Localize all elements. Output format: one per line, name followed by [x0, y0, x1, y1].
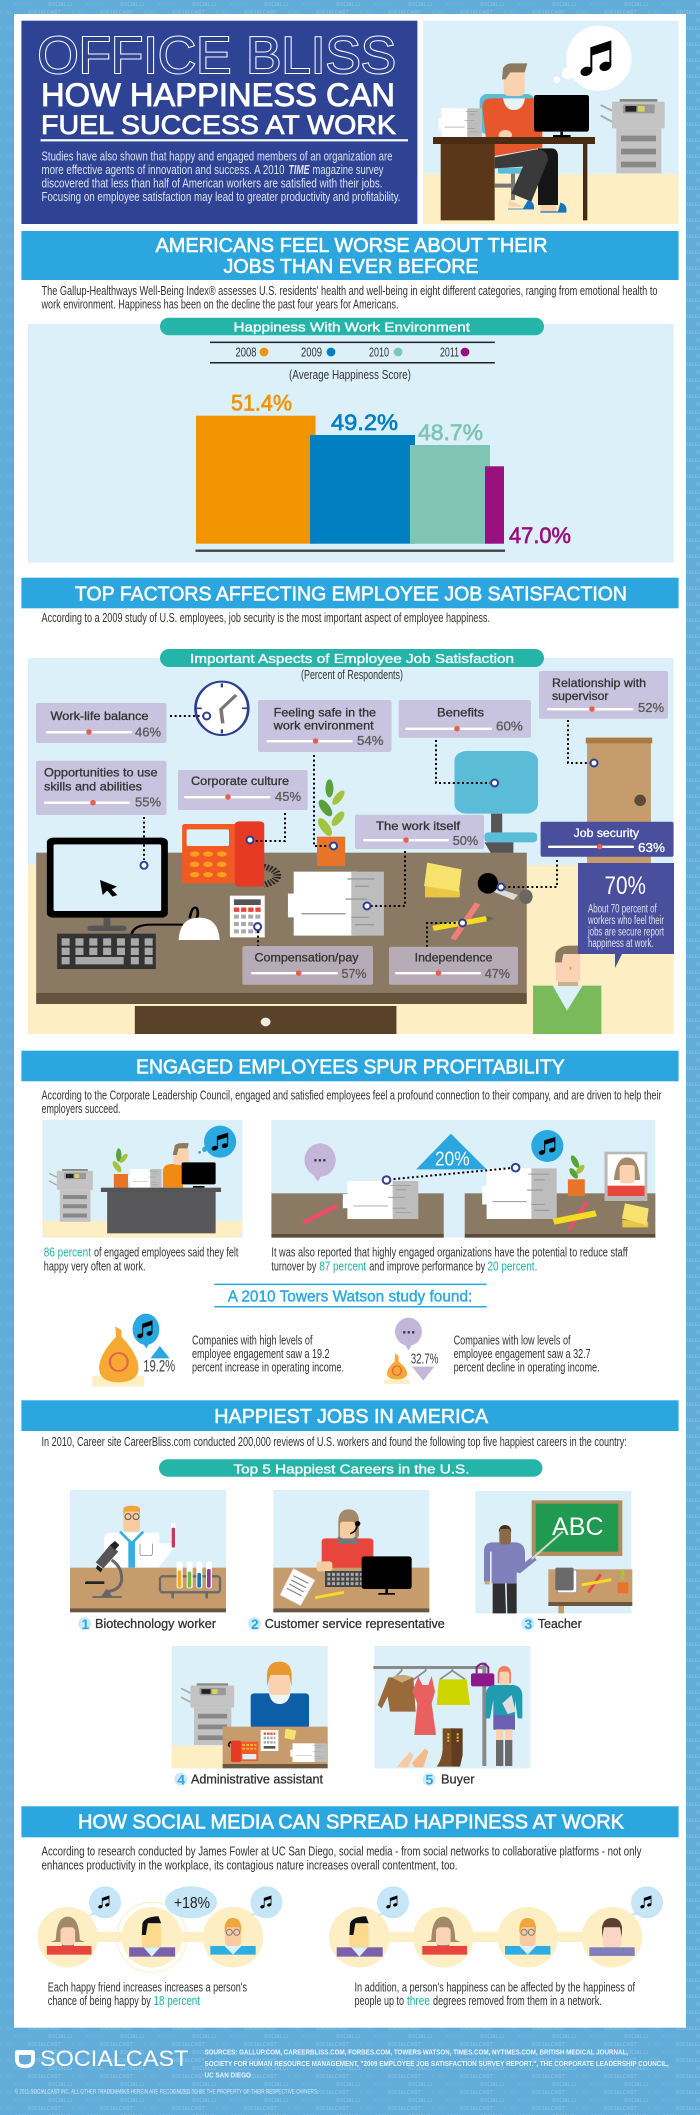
text block: James Fowler research [42, 1845, 642, 1872]
sticky note [622, 1203, 649, 1227]
text block: staff turnover [271, 1246, 628, 1273]
desk [548, 1569, 632, 1613]
icon: music bubble [531, 1130, 563, 1162]
label: opportunities 55%: skills and abilities [44, 780, 142, 794]
intro paragraph: TIME [288, 163, 310, 177]
employee with headset [322, 1509, 373, 1572]
label: 5 buyer: 5 [426, 1772, 434, 1788]
paper stack [288, 872, 384, 936]
label: relationship with supervisor 52%: 52% [638, 700, 664, 715]
text block: staff turnover: . [535, 1259, 537, 1273]
icon: office chair [454, 751, 538, 853]
section heading: happiest jobs [21, 1400, 679, 1431]
text block: three degrees: degrees removed from them in a network. [433, 1994, 602, 2008]
callout: 70 percent: workers who feel their [587, 915, 664, 927]
intro paragraph: magazine survey [312, 163, 384, 177]
value labels: 48.7% [418, 420, 483, 445]
section heading: engaged employees [21, 1051, 679, 1081]
text block: high engagement: employee engagement saw a 19.2 [192, 1347, 330, 1361]
footer sources [204, 2048, 669, 2080]
panel: happy employee at grey desk [42, 1120, 242, 1238]
section heading: social media: HOW SOCIAL MEDIA CAN SPREAD HAPPINESS AT WORK [78, 1811, 625, 1833]
label: feeling safe 54% [258, 700, 392, 752]
pink pencil [304, 1206, 337, 1223]
footer logo: Socialcast: SOCIALCAST [40, 2046, 189, 2071]
title: office bliss: OFFICE BLISS [38, 26, 396, 84]
subheading: Towers Watson: A 2010 Towers Watson study found: [228, 1289, 472, 1306]
label: relationship with supervisor 52%: supervisor [552, 689, 608, 703]
footer copyright: © 2011 SOCIALCAST INC. ALL OTHER TRADEMARKS HEREIN ARE RECOGNIZED TO BE THE PROPERTY OF THEIR RESPECTIVE OWNERS. [15, 2087, 318, 2095]
section heading: top factors: TOP FACTORS AFFECTING EMPLOYEE JOB SATISFACTION [75, 583, 627, 605]
label: opportunities 55% [36, 761, 166, 815]
triangle [416, 1134, 487, 1169]
text block: staff turnover: turnover by [271, 1259, 317, 1273]
section heading: Americans feel worse: JOBS THAN EVER BEFORE [224, 256, 478, 278]
section heading: Americans feel worse: AMERICANS FEEL WORSE ABOUT THEIR [156, 235, 548, 257]
stat: low engagement money bag and 32.7 percent: 32.7% [411, 1350, 438, 1367]
panel: customer service representative [273, 1490, 429, 1612]
pencils [582, 1574, 611, 1592]
callout: 70 percent: About 70 percent of [588, 904, 657, 916]
label: the work itself 50%: The work itself [376, 819, 461, 833]
text block: Corporate Leadership Council [42, 1088, 662, 1116]
legend: 2008 [236, 346, 257, 360]
desk [101, 1188, 221, 1233]
test tube rack [160, 1562, 220, 1598]
diagram: three connected friends [38, 1886, 283, 1972]
icon: computer monitor [47, 838, 168, 931]
handbag [471, 1664, 494, 1686]
label: opportunities 55%: Opportunities to use [44, 766, 158, 780]
text block: staff turnover: 20 percent [488, 1259, 535, 1273]
value labels: 49.2% [331, 410, 398, 435]
label: benefits 60%: Benefits [437, 706, 484, 720]
text block: 86 percent: of engaged employees said they felt [94, 1246, 239, 1260]
text block: low engagement [454, 1333, 600, 1375]
desk [223, 1727, 328, 1768]
label: benefits 60%: 60% [496, 719, 523, 734]
label: benefits 60% [399, 700, 531, 738]
text block: James Fowler research: enhances productivity in the workplace, its contagious nature increases overall contentment, too. [42, 1858, 458, 1872]
legend [210, 342, 495, 364]
subtitle line two: FUEL SUCCESS AT WORK [41, 110, 396, 140]
text block: high engagement [192, 1333, 344, 1375]
bubble: music [250, 1886, 282, 1918]
caption: percent of respondents: (Percent of Respondents) [301, 668, 403, 682]
pill: chart title [160, 649, 544, 667]
clothes rail [373, 1663, 486, 1766]
panel: administrative assistant [172, 1646, 328, 1768]
section heading: engaged employees: ENGAGED EMPLOYEES SPUR PROFITABILITY [136, 1056, 565, 1078]
panel: title block [21, 21, 417, 224]
label: opportunities 55%: 55% [135, 795, 161, 810]
intro paragraph [42, 150, 400, 204]
text block: three degrees: people up to [354, 1994, 404, 2008]
label: job security 63%: Job security [574, 826, 639, 840]
shopper figure [486, 1666, 522, 1766]
section heading: social media [21, 1806, 679, 1837]
section heading: top factors [21, 578, 679, 608]
value labels [231, 391, 571, 548]
panel: performance desks with 20 percent [271, 1120, 655, 1238]
text block: Gallup intro [41, 284, 658, 312]
desk [273, 1568, 429, 1612]
coat [378, 1675, 416, 1712]
panel: buyer [373, 1646, 530, 1768]
label: 20 percent: 20% [435, 1148, 470, 1170]
footer sources: UC SAN DIEGO [204, 2071, 251, 2080]
icon: keyboard and mouse [57, 908, 220, 969]
label: 3 teacher: 3 [524, 1616, 532, 1632]
icon: potted plant [315, 779, 347, 866]
potted plant [568, 1155, 586, 1196]
office worker [482, 63, 567, 213]
value labels: 51.4% [231, 391, 292, 416]
text block: high engagement: Companies with high levels of [192, 1333, 313, 1347]
label: relationship with supervisor 52% [539, 671, 668, 719]
label: 3 teacher [522, 1616, 582, 1632]
label: compensation 57%: Compensation/pay [254, 951, 358, 965]
bubble: plus 18 percent: +18% [174, 1895, 210, 1912]
connector lines [140, 712, 598, 947]
microscope [85, 1541, 122, 1597]
diagram: four connected people [329, 1886, 663, 1968]
intro paragraph: Focusing on employee satisfaction may lead to greater productivity and profitability. [42, 190, 400, 204]
hangers [395, 1666, 465, 1683]
bubble: music [630, 1886, 663, 1918]
text block: each happy friend [48, 1981, 247, 2008]
label: job security 63%: 63% [638, 840, 665, 855]
car key [478, 873, 518, 900]
printer [601, 99, 665, 173]
label: corporate culture 45%: Corporate culture [191, 774, 289, 788]
skirt [437, 1679, 470, 1705]
text block: each happy friend: Each happy friend increases increases a person's [48, 1981, 247, 1995]
footer sources: SOURCES: GALLUP.COM, CAREERBLISS.COM, FORBES.COM, TOWERS WATSON, TIMES.COM, NYTIMES.COM, BRITISH MEDICAL JOURNAL, [204, 2048, 628, 2057]
paper stack [128, 1169, 162, 1188]
label: independence 47%: 47% [485, 966, 510, 981]
computer monitor [534, 95, 589, 137]
text block: Gallup intro: work environment. Happiness has been on the decline the past four years for Americans. [41, 298, 398, 312]
value labels: 47.0% [509, 523, 571, 548]
sticky note [284, 1729, 296, 1740]
pill: top 5 careers [159, 1459, 542, 1477]
label: compensation 57% [242, 946, 373, 985]
sticky notes [424, 863, 462, 897]
plant [618, 1569, 628, 1593]
label: 2 customer service representative: Customer service representative [265, 1616, 445, 1631]
person: woman with red top [47, 1917, 91, 1955]
keyboard [325, 1571, 365, 1587]
label: the work itself 50% [355, 815, 484, 849]
stat: high engagement money bag and 19.2 percent: 19.2% [143, 1357, 175, 1376]
chalkboard [532, 1500, 622, 1556]
person: glasses and blue top [505, 1918, 550, 1955]
desk [36, 853, 533, 1034]
phone [229, 1741, 258, 1762]
text block: 86 percent [44, 1246, 239, 1273]
text block: low engagement: employee engagement saw a 32.7 [454, 1347, 591, 1361]
text block: Corporate Leadership Council: employers succeed. [42, 1102, 120, 1116]
crossed pencils [554, 1202, 596, 1229]
assistant figure [251, 1662, 309, 1728]
desk [70, 1568, 226, 1612]
lab coat scientist [104, 1506, 175, 1568]
legend: 2010 [369, 346, 389, 360]
boots [437, 1728, 463, 1767]
person: man with black hair [129, 1916, 175, 1957]
bubble: music [88, 1886, 121, 1918]
subtitle line one: HOW HAPPINESS CAN [41, 77, 395, 113]
label: work-life balance 46% [36, 703, 166, 743]
office colleague [533, 946, 601, 1034]
callout: 70 percent: happiness at work. [588, 938, 654, 950]
desk [433, 137, 595, 220]
intro paragraph: Studies have also shown that happy and engaged members of an organization are [42, 150, 393, 164]
clipboard [280, 1568, 315, 1606]
text block: job security intro: According to a 2009 study of U.S. employees, job security is the most important aspect of employee happiness. [42, 611, 490, 625]
label: independence 47%: Independence [415, 951, 493, 965]
text block: staff turnover: 87 percent [319, 1259, 367, 1273]
chair [480, 94, 535, 200]
pencils [433, 903, 495, 939]
label: 5 buyer [422, 1772, 475, 1788]
icon: music note [579, 40, 613, 78]
label: 4 administrative assistant: 4 [177, 1772, 185, 1788]
label: 5 buyer: Buyer [441, 1772, 475, 1787]
label: work-life balance 46%: Work-life balance [50, 709, 149, 723]
monitor [362, 1556, 412, 1595]
label: independence 47% [389, 947, 518, 985]
text block: each happy friend: 18 percent [154, 1994, 200, 2008]
section heading: happiest jobs: HAPPIEST JOBS IN AMERICA [214, 1406, 489, 1428]
pill: chart title: Important Aspects of Employee Job Satisfaction [190, 651, 514, 666]
potted plant [111, 1148, 129, 1188]
callout: 70 percent: 70% [604, 872, 646, 900]
teacher figure [484, 1525, 537, 1613]
dotted link with rings [383, 1164, 519, 1184]
bubble: music [377, 1886, 409, 1918]
monitor [182, 1162, 216, 1188]
intro paragraph: discovered that less than half of American workers are satisfied with their jobs. [42, 176, 382, 190]
label: 2 customer service representative: 2 [251, 1616, 259, 1632]
label: relationship with supervisor 52%: Relationship with [552, 676, 646, 690]
calculator [261, 1730, 278, 1751]
text block: three degrees: three [407, 1994, 430, 2008]
bars [196, 416, 504, 544]
label: compensation 57%: 57% [342, 966, 367, 981]
text block: 86 percent: happy very often at work. [44, 1259, 145, 1273]
label: job security 63% [541, 822, 674, 857]
text block: each happy friend: chance of being happy by [48, 1994, 151, 2008]
text block: low engagement: percent decline in operating income. [454, 1361, 600, 1375]
panel: hero illustration of happy office worker [423, 21, 679, 224]
person: man with black hair [337, 1916, 383, 1957]
icon: music bubble [198, 1126, 236, 1158]
panel: happiness bar chart [28, 318, 674, 563]
pill: top 5 careers: Top 5 Happiest Careers in the U.S. [234, 1461, 470, 1476]
papers [290, 1743, 327, 1762]
book [555, 1568, 577, 1593]
hand [317, 1561, 332, 1571]
label: work-life balance 46%: 46% [135, 725, 161, 740]
icon: thought bubble [553, 26, 632, 91]
test tube [171, 1523, 176, 1549]
printer [181, 1683, 234, 1745]
label: corporate culture 45% [178, 770, 308, 810]
label: feeling safe 54%: 54% [357, 733, 384, 748]
text block: 86 percent: 86 percent [44, 1246, 91, 1260]
panel: teacher [475, 1491, 632, 1613]
label: corporate culture 45%: 45% [275, 789, 301, 804]
pencil [315, 1592, 344, 1598]
picture frame [604, 1152, 647, 1201]
stat: low engagement money bag and 32.7 percent [384, 1318, 438, 1384]
label: 1 biotechnology worker: Biotechnology worker [95, 1616, 217, 1631]
text block: high engagement: percent increase in operating income. [192, 1361, 344, 1375]
label: 1 biotechnology worker: 1 [82, 1616, 90, 1632]
intro paragraph: more effective agents of innovation and success. A 2010 [42, 163, 285, 177]
text block: three degrees [354, 1981, 635, 2008]
legend: 2009 [301, 346, 322, 360]
pointer [532, 1532, 563, 1559]
text block: low engagement: Companies with low levels of [454, 1333, 571, 1347]
dress [412, 1676, 436, 1735]
printer [49, 1169, 93, 1222]
chalkboard letters: ABC [552, 1513, 604, 1541]
label: feeling safe 54%: work environment [273, 718, 374, 732]
text block: staff turnover: and improve performance by [369, 1259, 486, 1273]
callout: 70 percent: jobs are secure report [587, 927, 665, 939]
stat: high engagement money bag and 19.2 percent [92, 1314, 175, 1387]
label: the work itself 50%: 50% [453, 833, 479, 848]
icon: clock [196, 682, 248, 735]
panel: biotechnology worker [70, 1490, 226, 1612]
bubble: plus 18 percent [165, 1886, 217, 1918]
panel: office desk scene with job satisfaction factors [28, 649, 674, 1034]
icon: door [586, 738, 652, 864]
chart title pill [160, 318, 544, 335]
person: glasses and blue top [210, 1918, 256, 1955]
high heels [397, 1748, 428, 1767]
section heading: Americans feel worse [21, 231, 679, 280]
label: 4 administrative assistant: Administrative assistant [191, 1772, 323, 1787]
icon: chat bubble [304, 1143, 336, 1182]
label: feeling safe 54%: Feeling safe in the [274, 706, 376, 720]
icon: calculator [230, 896, 265, 937]
chart title pill: Happiness With Work Environment [234, 320, 470, 335]
person: woman with red top [422, 1917, 467, 1955]
axis caption: (Average Happiness Score) [289, 368, 411, 382]
label: 3 teacher: Teacher [538, 1616, 582, 1631]
legend: 2011 [440, 346, 459, 360]
person: man with brown hair [589, 1918, 635, 1956]
employee [163, 1143, 189, 1188]
callout: 70 percent [578, 863, 674, 968]
icon: telephone [182, 821, 277, 887]
paper stack [439, 108, 482, 137]
paper stacks [343, 1168, 557, 1219]
